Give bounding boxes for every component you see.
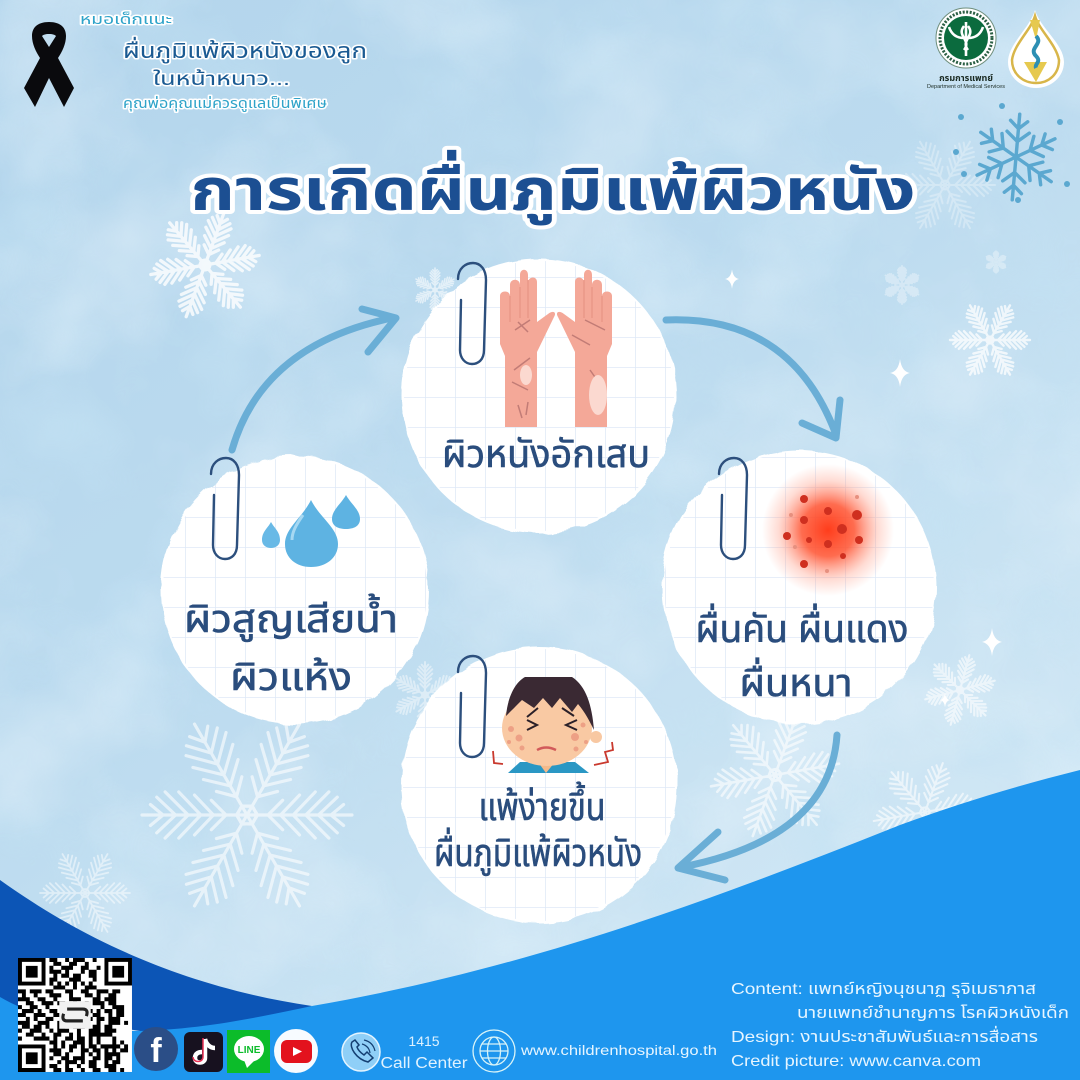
credits: Content: แพทย์หญิงนุชนาฏ รุจิเมธาภาส: [731, 981, 1036, 998]
panel: inflamed skin: [400, 258, 680, 538]
decorative snowflakes: [24, 117, 1044, 954]
icon: black ribbon: [24, 22, 74, 107]
credits: Design: งานประชาสัมพันธ์และการสื่อสาร: [731, 1025, 1038, 1046]
paper circle: [155, 450, 435, 730]
panel: dry skin: [155, 450, 435, 730]
bottom dark blue wave: [0, 880, 312, 1040]
icon: blue snowflake: [953, 103, 1070, 204]
arrow: rash to allergy: [678, 735, 837, 880]
website: www.childrenhospital.go.th: [520, 1043, 717, 1058]
arrow: inflammation to rash: [666, 320, 840, 438]
panel: allergy: [400, 646, 680, 926]
paper circle: [400, 258, 680, 538]
label: ผิวหนังอักเสบ: [442, 434, 650, 476]
label: ผื่นคัน ผื่นแดง: [696, 603, 908, 651]
header: parents note: คุณพ่อคุณแม่ควรดูแลเป็นพิเศษ: [123, 95, 327, 112]
header: rash topic: ผื่นภูมิแพ้ผิวหนังของลูก: [123, 36, 367, 64]
logo: ministry of public health: กรมการแพทย์: [939, 73, 993, 83]
call center text: [380, 1033, 468, 1072]
icon: sick child: [493, 677, 613, 773]
label second line: ผิวแห้ง: [230, 657, 352, 699]
title: การเกิดผื่นภูมิแพ้ผิวหนัง: [190, 149, 916, 226]
call center text: 1415: [408, 1033, 440, 1049]
logo: medical emblem: [1008, 10, 1064, 88]
call center text: Call Center: [380, 1055, 468, 1072]
sparkles: [725, 269, 1002, 707]
icon: line: [227, 1030, 270, 1073]
logo: ministry of public health: [927, 8, 1005, 90]
icon: globe: [473, 1030, 515, 1072]
arrow: dry skin to inflammation: [232, 309, 396, 450]
icon: facebook: [134, 1027, 178, 1071]
credits: นายแพทย์ชำนาญการ โรคผิวหนังเด็ก: [797, 1004, 1069, 1022]
header: winter: ในหน้าหนาว...: [153, 67, 290, 90]
icon: phone: [342, 1033, 380, 1071]
icon: tiktok: [184, 1032, 223, 1072]
credits: Credit picture: www.canva.com: [731, 1053, 981, 1070]
header: doctor advises: หมอเด็กแนะ: [80, 11, 172, 27]
panel: itchy rash: [660, 448, 940, 728]
bottom light blue wave: [0, 770, 1080, 1080]
credits: [731, 981, 1069, 1070]
icon: cracked hands: [500, 270, 612, 427]
icon: facebook: f: [150, 1032, 162, 1070]
icon: red rash: [762, 464, 894, 596]
label second line: ผื่นภูมิแพ้ผิวหนัง: [434, 827, 642, 876]
icon: water drops: [262, 495, 360, 567]
logo: ministry of public health: Department of Medical Services: [927, 84, 1005, 90]
label: ผิวสูญเสียน้ำ: [184, 593, 398, 642]
icon: youtube: [274, 1029, 318, 1073]
paper circle: [400, 646, 680, 926]
icon: line: LINE: [238, 1045, 261, 1056]
header text block: [80, 11, 367, 112]
QR code: [18, 958, 132, 1072]
label: แพ้ง่ายขึ้น: [478, 781, 606, 829]
paper circle: [660, 448, 940, 728]
label second line: ผื่นหนา: [740, 657, 852, 705]
